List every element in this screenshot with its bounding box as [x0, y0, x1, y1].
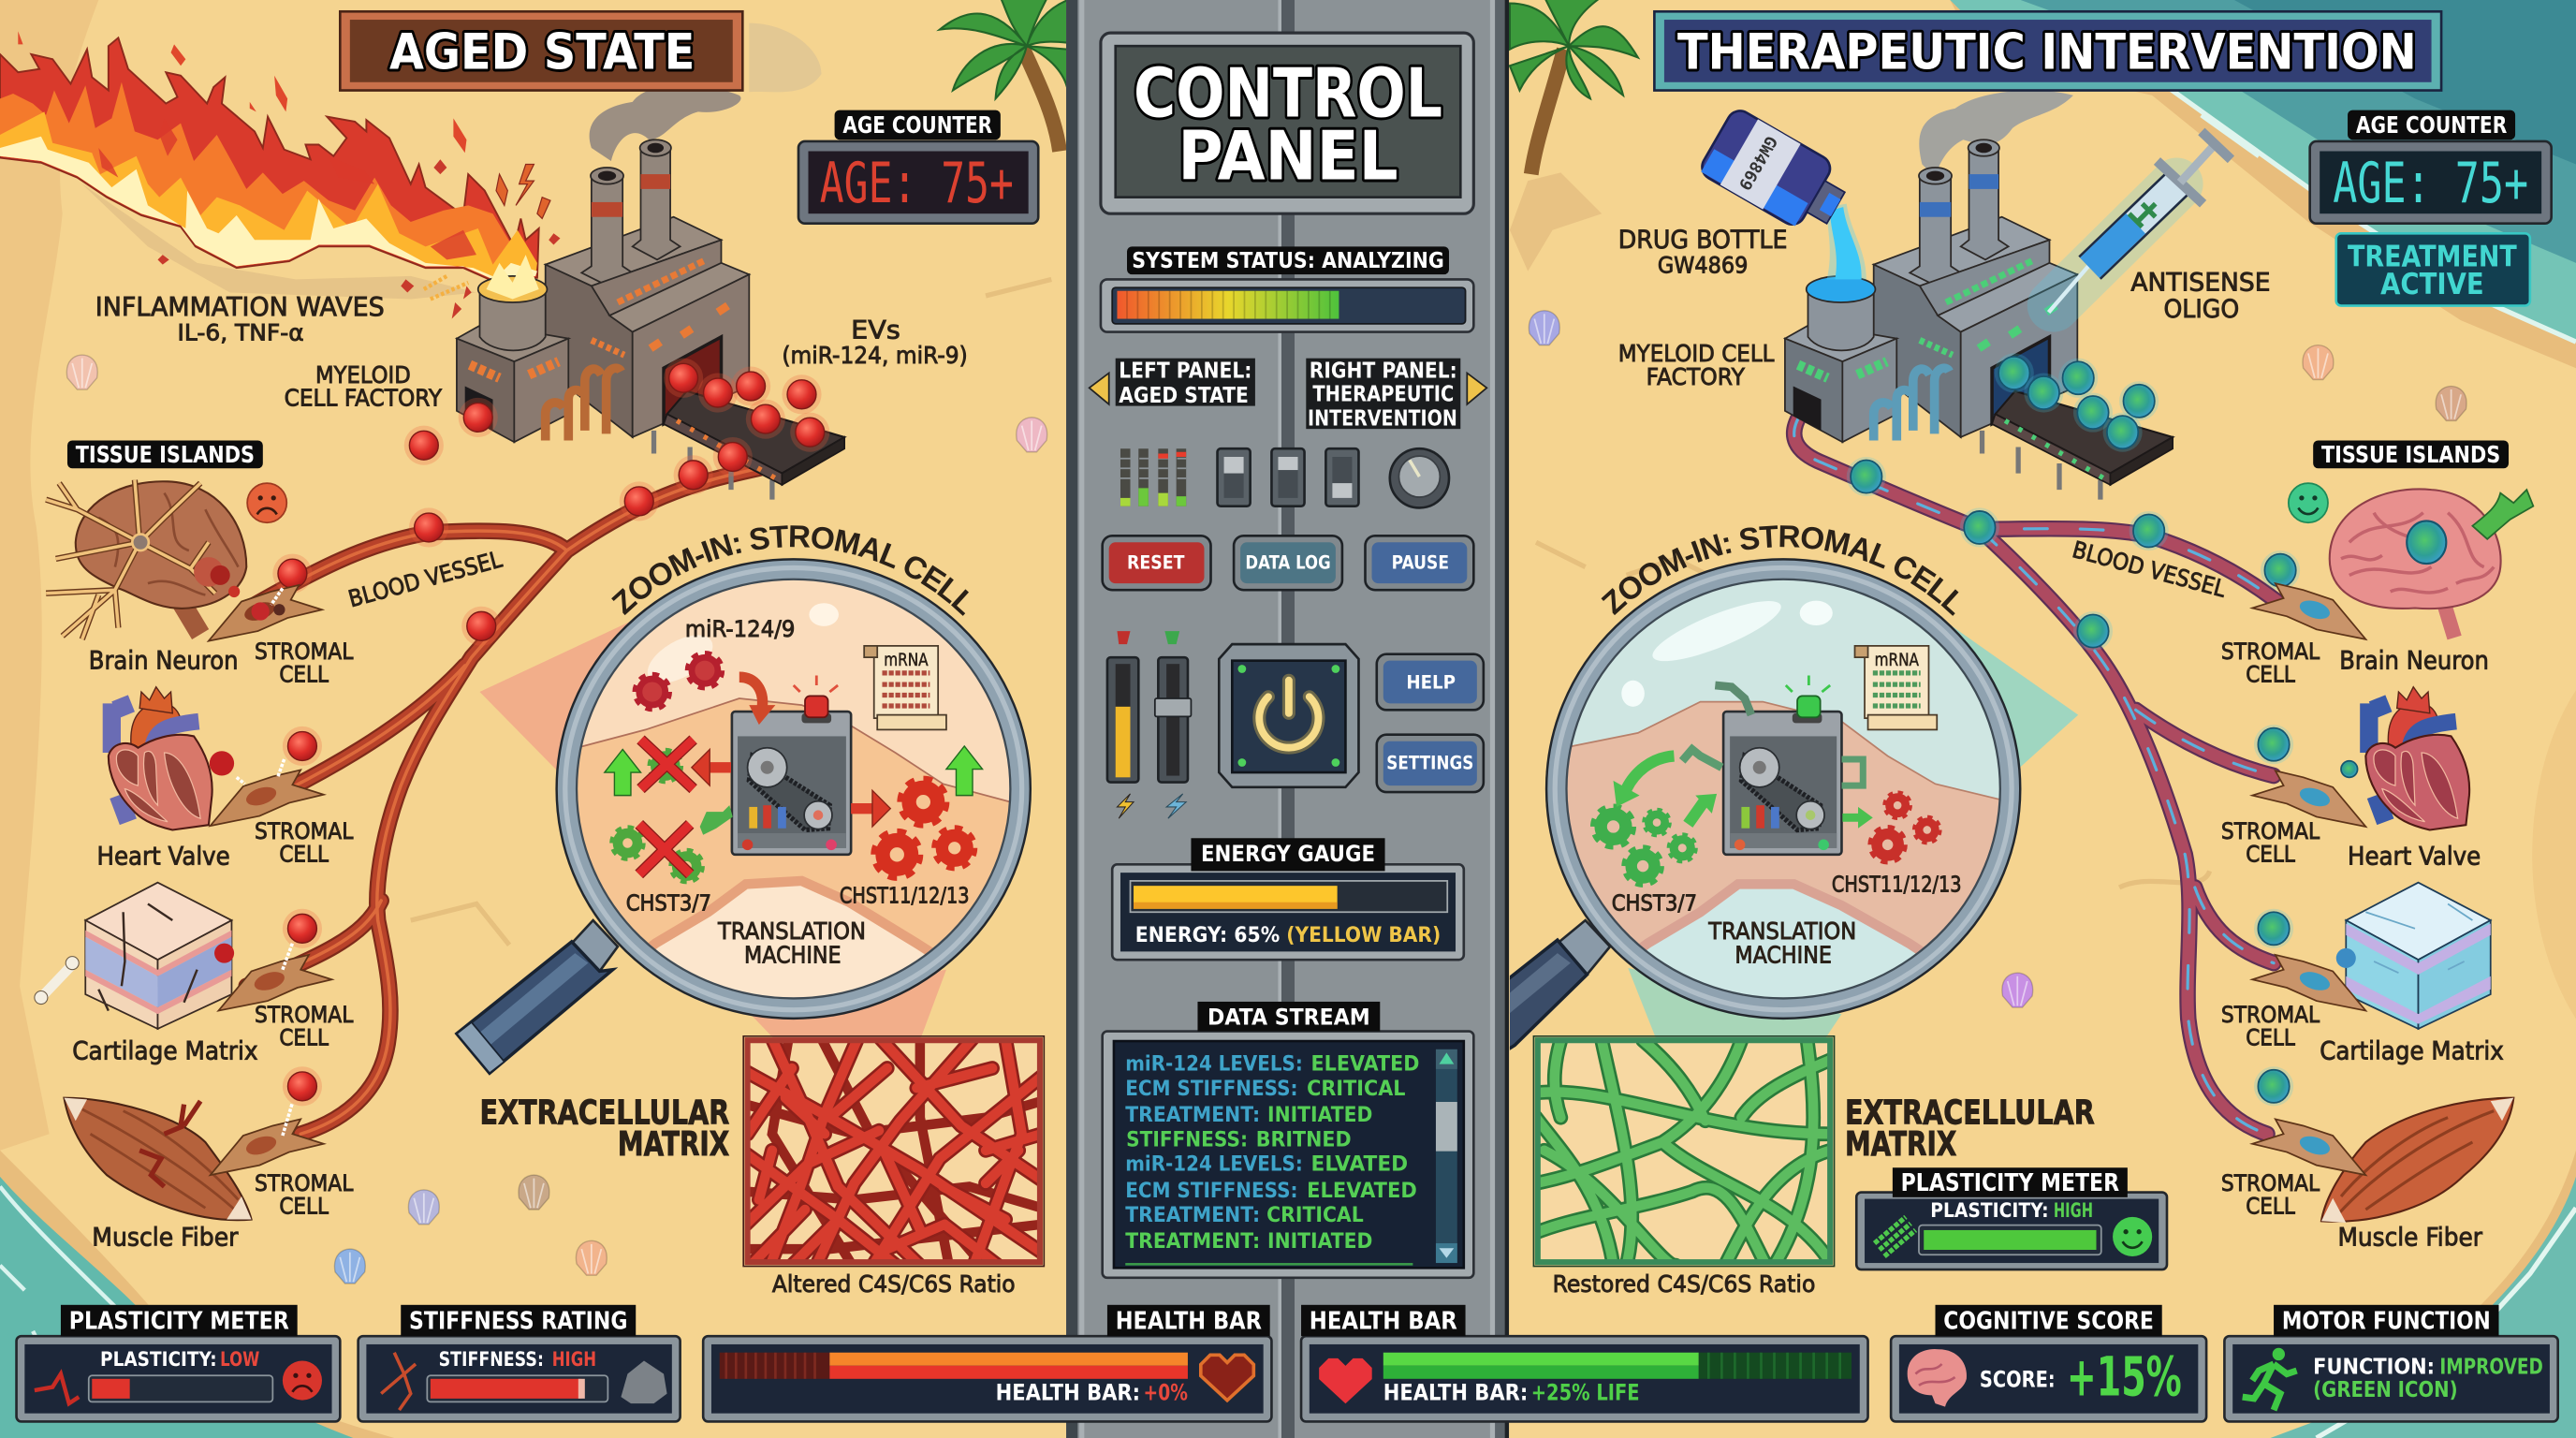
gears crossed out left	[612, 740, 702, 881]
stromal cell cartilage right	[2252, 955, 2365, 1011]
stromal cell heart right	[2252, 761, 2365, 827]
miRNA particles	[636, 653, 722, 709]
label: stromal cell 4 right	[2221, 1170, 2320, 1219]
title: aged state	[340, 11, 742, 91]
label: stromal cell 1 right: STROMAL	[2221, 638, 2320, 665]
label: stromal cell 4 right: CELL	[2246, 1193, 2296, 1219]
zoom lens right	[1544, 559, 2024, 1019]
HUD: cognitive score: SCORE:	[1980, 1367, 2056, 1393]
label: stromal cell 3 right	[2221, 1002, 2320, 1050]
heart valve tissue left	[109, 687, 234, 829]
data stream: ELEVATED	[1311, 1053, 1419, 1077]
system status: SYSTEM STATUS: ANALYZING	[1132, 249, 1444, 273]
label: stromal cell 1 left: CELL	[279, 662, 329, 688]
button: data log: DATA LOG	[1245, 551, 1331, 573]
lens labels right: TRANSLATION	[1707, 917, 1856, 945]
level meters	[1120, 448, 1186, 506]
heart valve tissue right	[2365, 687, 2469, 829]
HUD: health bar right	[1301, 1305, 1868, 1421]
label: inflammation waves	[95, 293, 385, 345]
toggle switches	[1218, 448, 1358, 506]
blood vessel network right	[1794, 414, 2277, 1134]
smoke right	[1919, 90, 2073, 178]
data stream	[1103, 1002, 1473, 1278]
label: drug bottle: DRUG BOTTLE	[1618, 227, 1788, 255]
label: tissue islands left: TISSUE ISLANDS	[76, 441, 255, 468]
myeloid cell factory left	[457, 139, 844, 500]
HUD: plasticity meter left: LOW	[220, 1347, 259, 1371]
label: cartilage matrix right: Cartilage Matrix	[2320, 1037, 2504, 1065]
HUD: health bar left: +0%	[1144, 1380, 1188, 1406]
label: drug bottle	[1618, 227, 1788, 278]
title: aged state: AGED STATE	[389, 24, 695, 81]
title: control panel: CONTROL	[1134, 54, 1442, 133]
curved heading: zoom-in right: ZOOM-IN: STROMAL CELL	[1601, 525, 1958, 616]
title: therapeutic intervention	[1654, 11, 2441, 91]
stromal cell heart left	[211, 759, 324, 826]
zoom lens left	[557, 559, 1035, 1019]
button: settings	[1377, 735, 1484, 792]
label: antisense oligo	[2130, 270, 2271, 324]
HUD: motor function: MOTOR FUNCTION	[2282, 1307, 2491, 1335]
label: myeloid cell factory right	[1618, 340, 1775, 390]
brain tissue right	[2330, 489, 2533, 638]
label: stromal cell 3 left	[255, 1002, 354, 1050]
data stream: ELVATED	[1311, 1153, 1408, 1177]
label: blood vessel left: BLOOD VESSEL	[345, 546, 505, 612]
energy gauge: ENERGY: 65%	[1135, 924, 1280, 947]
zoom beam right	[1628, 618, 2078, 1038]
inflammation flame wave	[0, 31, 560, 319]
HUD: plasticity meter left	[17, 1305, 340, 1421]
button: reset: RESET	[1127, 551, 1185, 573]
shells right	[1529, 311, 2466, 1007]
label: tissue islands right: TISSUE ISLANDS	[2321, 441, 2500, 468]
HUD: cognitive score: COGNITIVE SCORE	[1943, 1307, 2154, 1335]
button: pause: PAUSE	[1392, 551, 1449, 573]
zoom beam left	[479, 622, 946, 1040]
data stream: ECM STIFFNESS:	[1125, 1180, 1298, 1203]
lens labels left: TRANSLATION	[717, 917, 866, 945]
panel direction labels: RIGHT PANEL:	[1310, 360, 1457, 384]
arrows right	[1614, 749, 1873, 829]
label: extracellular matrix left: MATRIX	[618, 1125, 729, 1164]
title: control panel	[1101, 33, 1473, 213]
panel direction labels: LEFT PANEL:	[1119, 360, 1251, 384]
smiling face right	[2289, 483, 2328, 522]
slider controls	[1107, 631, 1191, 818]
treatment active badge: TREATMENT	[2348, 240, 2517, 273]
lens labels right: CHST3/7	[1612, 892, 1697, 917]
label: inflammation waves: IL-6, TNF-α	[178, 319, 304, 345]
HUD: plasticity meter right: PLASTICITY:	[1930, 1198, 2049, 1222]
data stream: INITIATED	[1267, 1104, 1372, 1127]
data stream: STIFFNESS:	[1126, 1128, 1248, 1152]
energy gauge	[1112, 838, 1464, 960]
button: settings: SETTINGS	[1386, 753, 1473, 774]
HUD: health bar right: HEALTH BAR:	[1383, 1380, 1528, 1406]
lens labels left: CHST11/12/13	[840, 885, 970, 909]
right panel background: sand and ocean	[1508, 0, 2576, 1438]
panel direction labels: AGED STATE	[1119, 384, 1249, 408]
energy gauge: ENERGY GAUGE	[1201, 841, 1375, 867]
label: stromal cell 2 right: STROMAL	[2221, 818, 2320, 844]
brain neuron tissue left	[46, 480, 246, 639]
left panel background: sand beach	[0, 0, 1068, 1438]
palm tree right	[1510, 0, 1638, 271]
active gears left	[875, 780, 973, 876]
muscle fiber tissue right	[2321, 1098, 2513, 1223]
label: stromal cell 4 left	[255, 1170, 354, 1219]
stromal cell cartilage left	[218, 944, 332, 1011]
data stream: TREATMENT:	[1125, 1230, 1260, 1254]
EV particles right	[1847, 353, 2387, 1106]
HUD: cognitive score: +15%	[2067, 1344, 2182, 1408]
label: myeloid cell factory	[285, 361, 443, 412]
data stream: TREATMENT:	[1125, 1104, 1260, 1127]
lens labels left: CHST3/7	[626, 892, 711, 917]
translation machine right	[1715, 675, 1863, 855]
arrows left	[605, 677, 983, 835]
HUD: stiffness rating: HIGH	[552, 1347, 596, 1371]
HUD: motor function: FUNCTION:	[2313, 1356, 2435, 1380]
label: extracellular matrix right: MATRIX	[1845, 1125, 1957, 1164]
cartilage matrix tissue left	[35, 883, 234, 1029]
label: brain neuron right: Brain Neuron	[2339, 647, 2489, 675]
HUD: plasticity meter right: HIGH	[2054, 1198, 2093, 1222]
palm tree left	[940, 0, 1068, 151]
label: stromal cell 1 right: CELL	[2246, 662, 2296, 688]
button: data log	[1234, 536, 1342, 590]
magnifier handle right	[1509, 918, 1611, 1050]
data stream: TREATMENT:	[1125, 1204, 1260, 1227]
label: stromal cell 2 right	[2221, 818, 2320, 868]
data stream: INITIATED	[1267, 1230, 1372, 1254]
HUD: plasticity meter right: PLASTICITY METER	[1901, 1169, 2119, 1197]
label: extracellular matrix left: EXTRACELLULAR	[479, 1094, 729, 1133]
label: stromal cell 1 right	[2221, 638, 2320, 688]
lens labels right: MACHINE	[1734, 942, 1832, 969]
button: pause	[1365, 536, 1473, 590]
HUD: plasticity meter left: PLASTICITY METER	[69, 1307, 289, 1335]
mRNA scroll left	[864, 646, 946, 729]
mRNA scroll right	[1855, 646, 1937, 729]
energy gauge: (YELLOW BAR)	[1286, 924, 1441, 947]
lens labels left: miR-124/9	[685, 616, 795, 642]
panel direction labels: THERAPEUTIC	[1312, 382, 1454, 406]
label: stromal cell 3 right: CELL	[2246, 1024, 2296, 1050]
stromal cell muscle left	[211, 1103, 324, 1175]
label: myeloid cell factory right: FACTORY	[1647, 363, 1746, 390]
age counter right	[2310, 110, 2552, 224]
HUD: health bar left: HEALTH BAR:	[996, 1380, 1140, 1406]
lens labels left: MACHINE	[744, 942, 842, 969]
system status	[1101, 246, 1473, 332]
HUD: motor function	[2224, 1305, 2558, 1421]
label: heart valve right: Heart Valve	[2348, 843, 2481, 871]
HUD: stiffness rating: STIFFNESS:	[439, 1347, 544, 1371]
sad face left	[247, 483, 286, 522]
drug bottle	[1697, 106, 1866, 279]
drug bottle: GW4869	[1734, 132, 1780, 193]
muscle fiber tissue left	[64, 1098, 252, 1220]
translation machine left	[732, 675, 851, 855]
mRNA scroll left: mRNA	[884, 651, 929, 670]
button: help: HELP	[1406, 672, 1456, 694]
label: EVs: (miR-124, miR-9)	[782, 342, 968, 369]
lens labels left	[626, 616, 970, 969]
label: stromal cell 3 left: STROMAL	[255, 1002, 354, 1028]
label: inflammation waves: INFLAMMATION WAVES	[95, 293, 385, 322]
label: stromal cell 3 left: CELL	[279, 1024, 329, 1050]
label: myeloid cell factory: MYELOID	[315, 361, 411, 389]
magnifier handle left	[457, 920, 618, 1073]
panel direction labels: INTERVENTION	[1308, 407, 1457, 432]
data stream: DATA STREAM	[1208, 1005, 1370, 1031]
smoke left	[590, 23, 822, 161]
label: extracellular matrix right: EXTRACELLULAR	[1845, 1094, 2095, 1133]
EV particles left	[272, 359, 829, 1106]
label: myeloid cell factory: CELL FACTORY	[285, 385, 443, 412]
data stream: BRITNED	[1256, 1128, 1352, 1152]
label: heart valve left: Heart Valve	[97, 843, 230, 871]
HUD: stiffness rating	[359, 1305, 681, 1421]
shells left	[66, 355, 1047, 1284]
curved heading: zoom-in left: ZOOM-IN: STROMAL CELL	[611, 525, 969, 616]
label: stromal cell 4 right: STROMAL	[2221, 1170, 2320, 1196]
treatment active badge	[2336, 233, 2530, 306]
HUD: motor function: (GREEN ICON)	[2313, 1378, 2458, 1402]
label: stromal cell 4 left: CELL	[279, 1193, 329, 1219]
extracellular matrix left	[743, 1036, 1044, 1269]
label: drug bottle: GW4869	[1658, 252, 1748, 278]
lens labels right	[1612, 873, 1962, 969]
label: muscle fiber left: Muscle Fiber	[92, 1225, 239, 1253]
myeloid cell factory right	[1785, 139, 2173, 500]
label: myeloid cell factory right: MYELOID CELL	[1618, 340, 1775, 367]
data stream: miR-124 LEVELS:	[1125, 1153, 1303, 1177]
green gears right	[1594, 807, 1695, 884]
button: reset	[1103, 536, 1211, 590]
label: stromal cell 3 right: STROMAL	[2221, 1002, 2320, 1028]
label: stromal cell 2 left: STROMAL	[255, 818, 354, 844]
HUD: health bar left: HEALTH BAR	[1116, 1307, 1262, 1335]
label: EVs	[782, 317, 968, 369]
label: stromal cell 2 left: CELL	[279, 842, 329, 868]
extracellular matrix right	[1533, 1036, 1835, 1267]
HUD: health bar left	[703, 1305, 1271, 1421]
data stream: miR-124 LEVELS:	[1125, 1053, 1303, 1077]
label: stromal cell 1 left	[255, 638, 354, 688]
label: antisense oligo: ANTISENSE	[2130, 270, 2271, 298]
label: extracellular matrix left	[479, 1094, 729, 1164]
mRNA scroll right: mRNA	[1875, 651, 1919, 670]
label: cartilage matrix left: Cartilage Matrix	[72, 1037, 258, 1065]
treatment active badge: ACTIVE	[2380, 268, 2484, 301]
centre control panel background	[1066, 0, 1509, 1438]
age counter left: AGE: 75+	[820, 152, 1014, 216]
label: restored ratio: Restored C4S/C6S Ratio	[1553, 1270, 1815, 1298]
HUD: health bar right: +25% LIFE	[1531, 1380, 1640, 1406]
data stream: ELEVATED	[1307, 1180, 1417, 1203]
red gears right	[1871, 793, 1939, 861]
stromal cell brain left	[209, 585, 322, 641]
label: EVs: EVs	[851, 317, 900, 345]
HUD: cognitive score	[1891, 1305, 2206, 1421]
rotary knob	[1390, 448, 1449, 507]
syringe	[2049, 131, 2231, 313]
stromal cell brain right	[2252, 583, 2365, 639]
data stream: CRITICAL	[1307, 1078, 1406, 1101]
label: stromal cell 2 left	[255, 818, 354, 868]
HUD: motor function: IMPROVED	[2439, 1356, 2543, 1380]
label: extracellular matrix right	[1845, 1094, 2095, 1164]
lens labels right: CHST11/12/13	[1832, 873, 1962, 897]
label: antisense oligo: OLIGO	[2163, 296, 2239, 324]
label: muscle fiber right: Muscle Fiber	[2338, 1225, 2482, 1253]
HUD: plasticity meter left: PLASTICITY:	[100, 1347, 217, 1371]
data stream: CRITICAL	[1266, 1204, 1364, 1227]
power button	[1219, 644, 1358, 787]
age counter right: AGE COUNTER	[2356, 111, 2507, 139]
HUD: plasticity meter right	[1856, 1167, 2167, 1269]
HUD: stiffness rating: STIFFNESS RATING	[409, 1307, 627, 1335]
stromal cell muscle right	[2252, 1119, 2365, 1175]
title: therapeutic intervention: THERAPEUTIC INTERVENTION	[1677, 24, 2417, 81]
label: stromal cell 2 right: CELL	[2246, 842, 2296, 868]
cartilage matrix tissue right	[2336, 883, 2491, 1029]
label: stromal cell 4 left: STROMAL	[255, 1170, 354, 1196]
HUD: health bar right: HEALTH BAR	[1310, 1307, 1457, 1335]
data stream: ECM STIFFNESS:	[1125, 1078, 1298, 1101]
label: stromal cell 1 left: STROMAL	[255, 638, 354, 665]
title: control panel: PANEL	[1178, 116, 1398, 195]
label: blood vessel right: BLOOD VESSEL	[2070, 536, 2230, 603]
age counter left: AGE COUNTER	[842, 111, 992, 139]
label: brain neuron left: Brain Neuron	[89, 647, 238, 675]
button: help	[1377, 654, 1484, 710]
age counter left	[798, 110, 1038, 224]
panel direction labels	[1090, 359, 1486, 432]
label: altered ratio: Altered C4S/C6S Ratio	[772, 1270, 1016, 1298]
blood vessel network left	[243, 468, 759, 1134]
